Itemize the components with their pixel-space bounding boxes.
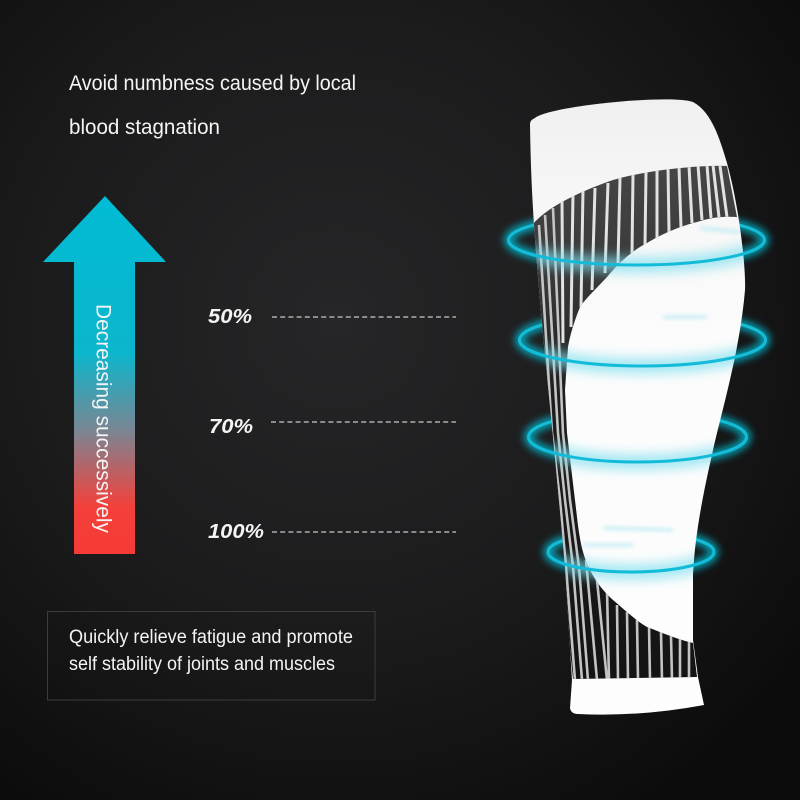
- compression sleeve with rings: [508, 99, 766, 715]
- pressure label: 100%: 100%: [208, 521, 264, 543]
- heading: avoid numbness: Avoid numbness caused by local: [69, 72, 356, 95]
- arrow: decreasing successively: [43, 196, 166, 554]
- pressure label: 70%: 70%: [209, 416, 253, 438]
- heading: avoid numbness: [69, 72, 356, 139]
- callout box: relieve fatigue: Quickly relieve fatigue and promote: [69, 627, 353, 648]
- rings: front halves: [508, 240, 766, 572]
- sleeve body: [530, 99, 746, 715]
- callout box: relieve fatigue: [48, 612, 375, 700]
- heading: avoid numbness: blood stagnation: [69, 116, 220, 139]
- rings: back halves: [508, 215, 766, 572]
- pressure label: 50%: 50%: [208, 306, 252, 328]
- callout box: relieve fatigue: self stability of joints and muscles: [69, 654, 335, 675]
- soft glow bands on sleeve: [535, 238, 744, 587]
- arrow: decreasing successively: Decreasing successively: [92, 304, 114, 533]
